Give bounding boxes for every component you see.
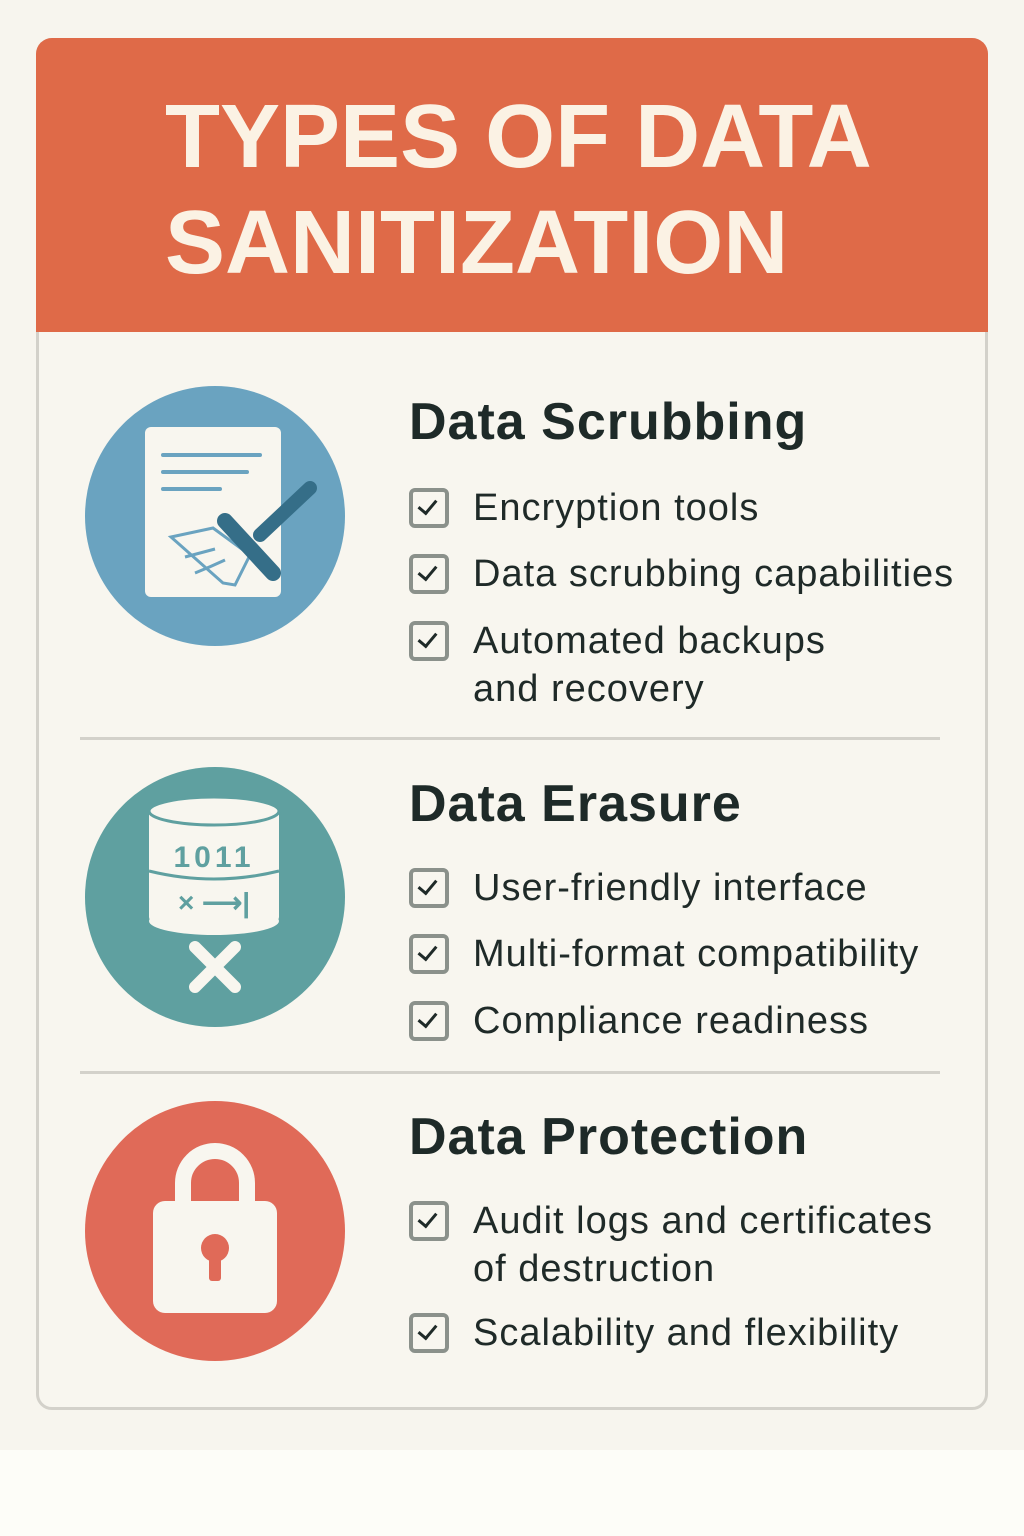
section heading: Data Erasure: Data Erasure — [409, 775, 742, 833]
item: Compliance readiness: Compliance readiness — [473, 1000, 869, 1042]
title: TYPES OF DATA — [165, 87, 872, 187]
item: Scalability: Scalability and flexibility — [473, 1312, 899, 1354]
icon: document with brush — [85, 386, 345, 646]
icon: database erase: 1011 — [173, 841, 255, 874]
item: Automated backups: Automated backups — [473, 620, 826, 662]
item: Audit logs — [409, 1200, 933, 1290]
item: Multi-format compatibility: Multi-format compatibility — [473, 933, 919, 975]
icon: padlock — [85, 1101, 345, 1361]
item: Audit logs: of destruction — [473, 1248, 715, 1290]
item: Data scrubbing capabilities: Data scrubbing capabilities — [473, 553, 954, 595]
section heading: Data Scrubbing: Data Scrubbing — [409, 393, 807, 451]
header banner — [36, 38, 988, 332]
item: Audit logs: Audit logs and certificates — [473, 1200, 933, 1242]
item: Encryption tools: Encryption tools — [473, 487, 759, 529]
item: User-friendly interface: User-friendly interface — [473, 867, 868, 909]
section heading: Data Protection: Data Protection — [409, 1108, 808, 1166]
icon: database erase: × ⟶| — [178, 887, 250, 918]
item: Automated backups: and recovery — [473, 668, 705, 710]
item: Automated backups — [409, 620, 826, 710]
title: SANITIZATION — [165, 193, 788, 293]
title — [165, 87, 872, 293]
icon: database erase — [85, 767, 345, 1027]
